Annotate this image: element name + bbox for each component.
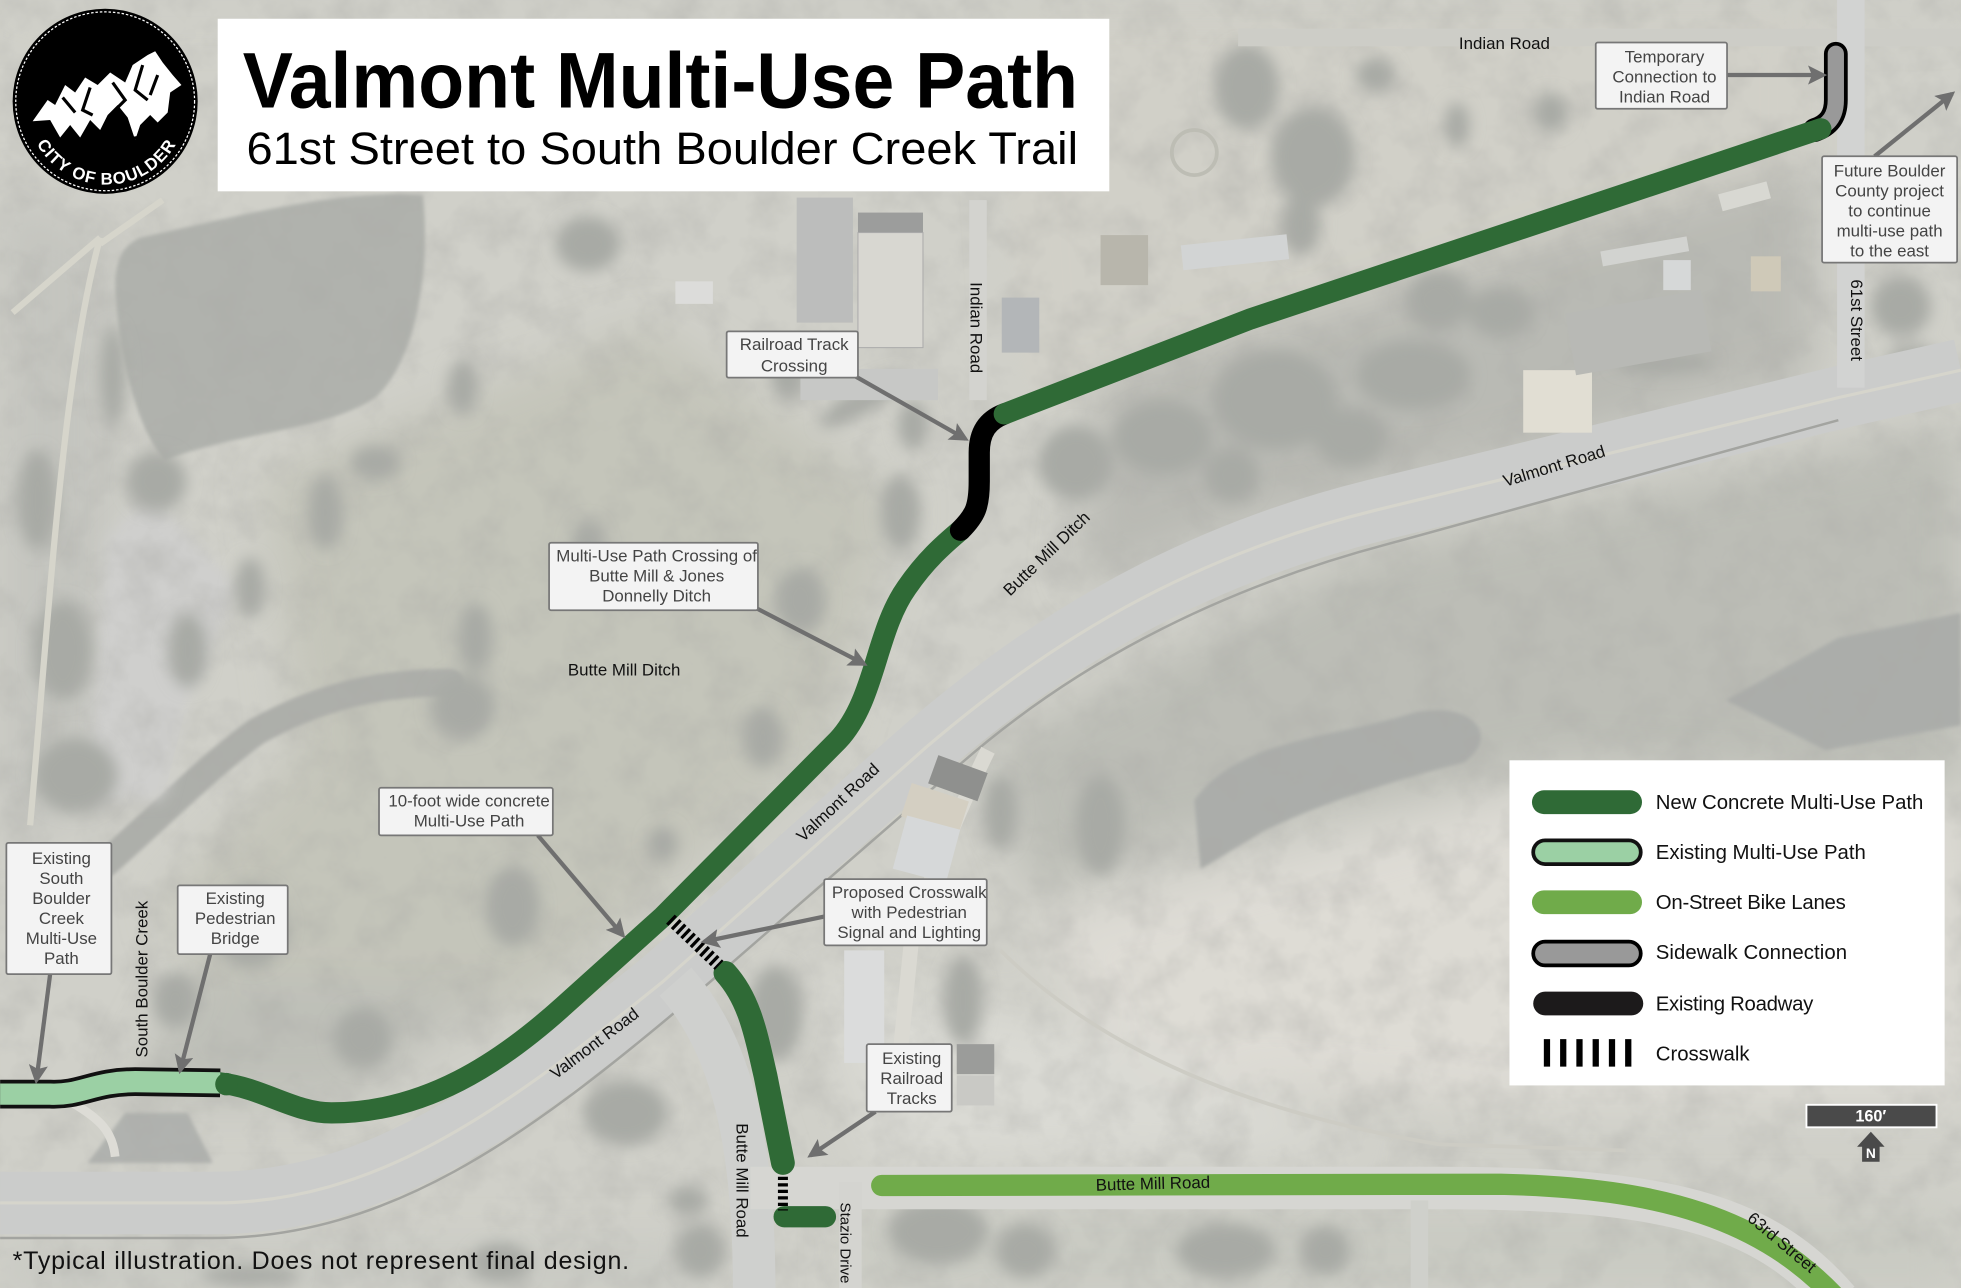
road labels: South Boulder Creek — [133, 900, 152, 1057]
existing multi-use path — [0, 1073, 238, 1095]
legend: sidewalk connection — [1533, 942, 1847, 965]
road labels: Butte Mill Road — [733, 1123, 752, 1238]
subtitle: 61st Street to South Boulder Creek Trail — [246, 123, 1078, 174]
callout: existing pedestrian bridge: Bridge — [211, 929, 260, 948]
road labels: 63rd Street — [1744, 1208, 1820, 1277]
new concrete path: north-east segment — [1004, 129, 1821, 414]
callout: existing railroad tracks — [810, 1044, 952, 1155]
legend: new concrete path — [1532, 790, 1923, 814]
legend — [1509, 760, 1945, 1085]
City of Boulder logo: CITY OF BOULDER — [38, 140, 176, 185]
legend: bike lanes: On-Street Bike Lanes — [1656, 892, 1846, 914]
new concrete path: stub at Stazio Drive — [784, 1208, 825, 1225]
callout: ditch crossing: Butte Mill & Jones — [589, 566, 724, 585]
callout: existing South Boulder Creek path: South — [39, 869, 83, 888]
callout: ditch crossing: Multi-Use Path Crossing of — [556, 546, 757, 565]
callout: ditch crossing — [549, 543, 864, 664]
callout: proposed crosswalk: with Pedestrian — [851, 903, 967, 922]
road labels: Valmont Road — [793, 760, 883, 846]
existing roadway segment (railroad crossing) — [960, 414, 1004, 530]
callout: future county project: County project — [1835, 181, 1944, 200]
crosswalk at Valmont Road — [670, 919, 719, 965]
legend: existing path: Existing Multi-Use Path — [1656, 842, 1866, 864]
road labels: Stazio Drive — [836, 1203, 853, 1283]
road labels: Butte Mill Road — [1095, 1173, 1210, 1195]
callout: temporary connection: Connection to — [1612, 68, 1717, 87]
legend: existing path — [1533, 840, 1866, 864]
legend: crosswalk — [1547, 1039, 1750, 1067]
road labels: 61st Street — [1847, 279, 1866, 361]
callout: proposed crosswalk — [704, 879, 987, 945]
callout: railroad track crossing — [727, 331, 965, 439]
callout: future county project: multi-use path — [1837, 221, 1943, 240]
callout: proposed crosswalk: Signal and Lighting — [837, 923, 981, 942]
on-street bike lanes — [882, 1184, 1838, 1288]
callout: future county project — [1822, 94, 1957, 263]
north arrow — [1857, 1132, 1885, 1162]
legend: new concrete path: New Concrete Multi-Use Path — [1656, 792, 1923, 814]
callout: future county project: to the east — [1850, 241, 1929, 260]
road labels: Valmont Road — [547, 1004, 642, 1083]
callout: existing South Boulder Creek path — [6, 843, 111, 1080]
callout: railroad track crossing: Crossing — [761, 356, 827, 375]
callout: existing South Boulder Creek path: Multi-Use — [26, 929, 97, 948]
callout: existing South Boulder Creek path: Boulder — [32, 889, 91, 908]
road labels: Valmont Road — [1501, 442, 1607, 491]
title: Valmont Multi-Use Path — [243, 37, 1078, 125]
legend: bike lanes — [1532, 890, 1846, 914]
buildings and lots — [650, 130, 1781, 1105]
new concrete path: Butte Mill Road segment — [725, 973, 783, 1163]
callout: future county project: to continue — [1848, 201, 1931, 220]
title panel — [218, 19, 1109, 191]
callout: existing pedestrian bridge: Pedestrian — [195, 909, 276, 928]
footnote: *Typical illustration. Does not represent final design. — [13, 1247, 629, 1275]
crosswalk at Butte Mill Road — [779, 1177, 787, 1210]
callout: temporary connection: Indian Road — [1619, 88, 1710, 107]
new concrete path: main segment south-west — [220, 530, 960, 1113]
scale bar: 160′ — [1855, 1108, 1886, 1126]
callout: existing pedestrian bridge — [178, 885, 288, 1070]
callout: future county project: Future Boulder — [1834, 161, 1946, 180]
callout: existing South Boulder Creek path: Path — [44, 949, 79, 968]
callout: existing South Boulder Creek path: Creek — [39, 909, 84, 928]
gravel area near pond — [88, 494, 238, 800]
callout: existing railroad tracks: Railroad — [880, 1069, 943, 1088]
creek — [106, 683, 450, 863]
legend: sidewalk connection: Sidewalk Connection — [1656, 942, 1847, 964]
callout: 10-foot path — [379, 788, 623, 935]
callout: temporary connection — [1596, 43, 1823, 109]
callout: existing railroad tracks: Tracks — [887, 1089, 937, 1108]
City of Boulder logo — [12, 8, 198, 194]
legend: crosswalk: Crosswalk — [1656, 1043, 1750, 1065]
north arrow: N — [1866, 1146, 1876, 1161]
callout: existing South Boulder Creek path: Existing — [32, 849, 91, 868]
callout: 10-foot path: Multi-Use Path — [414, 812, 524, 831]
sidewalk connection to Indian Road — [1815, 54, 1836, 130]
road labels: Butte Mill Ditch — [1000, 508, 1094, 600]
callout: ditch crossing: Donnelly Ditch — [602, 586, 711, 605]
callout: 10-foot path: 10-foot wide concrete — [388, 792, 550, 811]
field shadows — [1194, 613, 1961, 869]
callout: railroad track crossing: Railroad Track — [740, 335, 849, 354]
scale bar — [1806, 1105, 1936, 1127]
callout: proposed crosswalk: Proposed Crosswalk — [832, 883, 987, 902]
pond — [115, 194, 425, 460]
callout: existing railroad tracks: Existing — [882, 1049, 941, 1068]
road labels: Indian Road — [966, 282, 985, 373]
road labels: Butte Mill Ditch — [568, 660, 680, 679]
callout: existing pedestrian bridge: Existing — [206, 889, 265, 908]
legend: existing roadway: Existing Roadway — [1656, 993, 1814, 1015]
road labels: Indian Road — [1459, 34, 1550, 53]
callout: temporary connection: Temporary — [1625, 48, 1705, 67]
legend: existing roadway — [1533, 992, 1814, 1015]
